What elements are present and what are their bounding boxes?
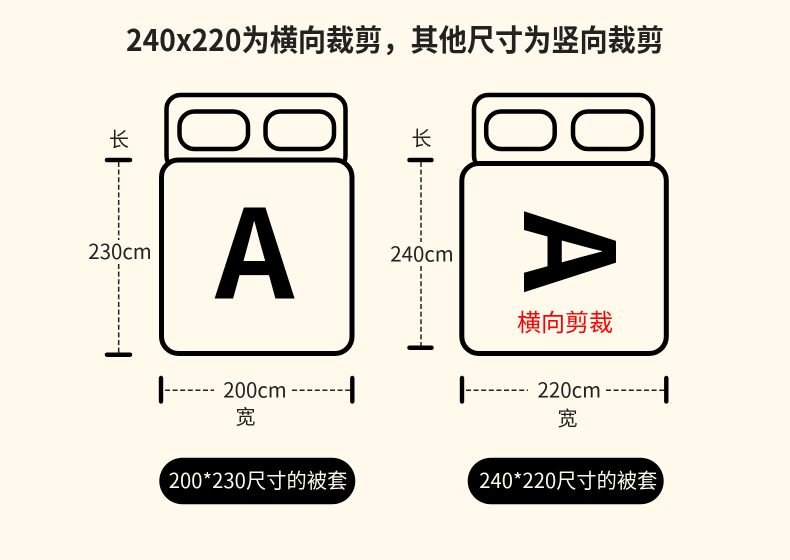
panel: bed A, 200x230 (88, 95, 355, 504)
length dimension (88, 124, 152, 355)
right pillow (266, 112, 334, 149)
bottom bar (410, 345, 432, 350)
caption pill (468, 458, 664, 504)
lower dashes (118, 264, 120, 353)
width value: 220cm (538, 374, 601, 404)
right dashes (606, 389, 665, 391)
upper dashes (118, 162, 120, 240)
caption pill: 240*220尺寸的被套 (479, 465, 657, 494)
duvet (462, 164, 666, 354)
top bar (410, 158, 432, 162)
left pillow (180, 112, 248, 149)
length label: 长 (109, 124, 129, 152)
left tick (460, 378, 464, 402)
red note: 横向剪裁 (517, 303, 613, 338)
width label: 宽 (558, 402, 578, 432)
left dashes (165, 389, 214, 391)
length value: 230cm (88, 235, 152, 265)
title: 240x220为横向裁剪，其他尺寸为竖向裁剪 (126, 16, 664, 60)
length value: 240cm (390, 238, 454, 268)
width dimension (161, 374, 352, 430)
right tick (664, 378, 668, 402)
letter A rotated: A (488, 211, 668, 292)
width value: 200cm (223, 374, 287, 404)
headboard (166, 95, 346, 170)
left dashes (466, 389, 528, 391)
caption pill (159, 458, 355, 504)
left tick (159, 378, 163, 402)
duvet (162, 160, 352, 354)
panel: bed B, 240x220 (390, 95, 668, 504)
right pillow (573, 112, 642, 149)
left pillow (486, 112, 555, 149)
letter A upright: A (214, 156, 295, 334)
length dimension (390, 122, 454, 348)
bottom bar (107, 352, 130, 357)
caption pill: 200*230尺寸的被套 (169, 465, 347, 494)
width label: 宽 (236, 401, 256, 430)
lower dashes (420, 266, 422, 346)
upper dashes (420, 162, 422, 242)
headboard (474, 95, 653, 170)
width dimension (462, 374, 666, 432)
top bar (107, 158, 130, 162)
right tick (350, 378, 354, 402)
right dashes (292, 389, 350, 391)
length label: 长 (412, 122, 432, 152)
